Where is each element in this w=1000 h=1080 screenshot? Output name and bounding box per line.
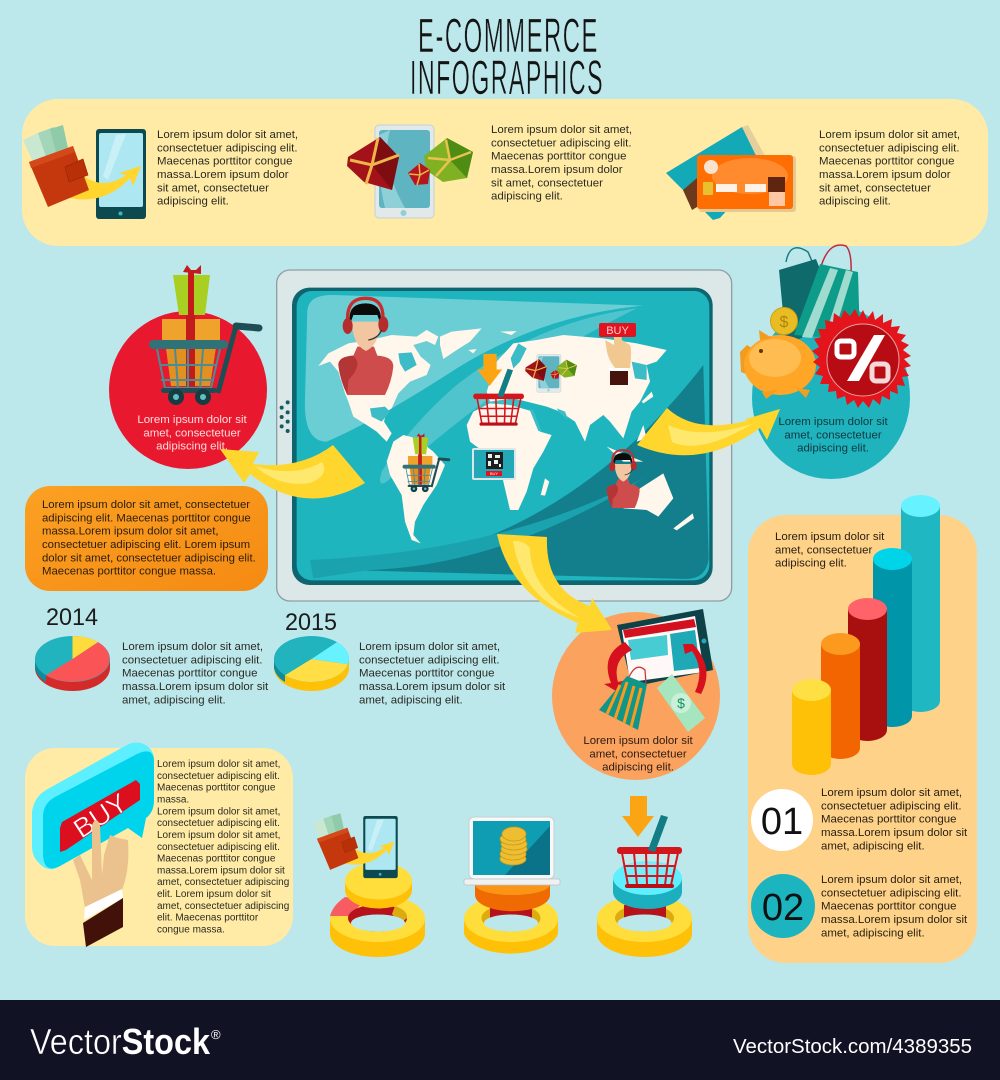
text: teal circle caption: amet, consectetuer — [784, 429, 882, 441]
badge: 01: 01 — [761, 801, 803, 843]
text: buy description: consectetuer adipiscing elit. — [157, 818, 280, 829]
text: buy description: elit. Maecenas porttitor — [157, 913, 259, 924]
pedestal: basket on ring — [597, 796, 692, 957]
text: buy description: congue massa. — [157, 924, 225, 935]
text: 2014 description: Maecenas porttitor congue — [122, 668, 257, 680]
text: item 01 description: Maecenas porttitor congue — [821, 814, 956, 826]
text: item 02 description: massa.Lorem ipsum dolor sit — [821, 914, 968, 926]
icon: wallet and phone — [23, 125, 146, 219]
icon: dollar banknote: $ — [677, 695, 685, 711]
pie chart: 2015 — [274, 636, 349, 691]
icon: shopping bags — [779, 245, 860, 345]
text: third top description: sit amet, consectetuer — [819, 182, 931, 194]
map seas — [370, 343, 647, 432]
text: first top description: sit amet, consectetuer — [157, 182, 269, 194]
pedestal: wallet on ring — [313, 813, 425, 957]
text: teal circle caption: Lorem ipsum dolor sit — [778, 416, 888, 428]
text: item 02 description: Lorem ipsum dolor sit amet, — [821, 874, 962, 886]
icon: percent badge — [812, 309, 911, 408]
text: 2015 description: Maecenas porttitor congue — [359, 668, 494, 680]
text: 2015 description: amet, adipiscing elit. — [359, 694, 463, 706]
text: teal circle caption: adipiscing elit. — [797, 443, 869, 455]
icon: map tablet gifts — [525, 354, 577, 392]
icon: map buy button with hand: BUY — [606, 325, 629, 337]
text: buy description: Lorem ipsum dolor sit amet, — [157, 830, 280, 841]
text: red circle caption: adipiscing elit. — [156, 441, 228, 453]
text: second top description: Maecenas porttitor congue — [491, 151, 626, 163]
text: red circle caption: Lorem ipsum dolor sit — [137, 414, 247, 426]
text: buy description: Lorem ipsum dolor sit amet, — [157, 759, 280, 770]
panel: orange text box — [25, 486, 268, 591]
icon: circular red arrows — [604, 642, 706, 694]
icon: buy speech bubble: BUY — [68, 787, 133, 844]
panel: orange text box: consectetuer adipiscing elit. Lorem ipsum — [42, 539, 250, 551]
icon: support agent small — [607, 450, 640, 508]
icon: tablet with gifts — [347, 125, 473, 218]
icon: credit cards — [666, 125, 796, 220]
text: buy description: amet, consectetuer adipiscing — [157, 901, 289, 912]
text: 2014 description: consectetuer adipiscing elit. — [122, 654, 263, 666]
icon: striped bag — [599, 667, 647, 730]
text: chart description: Lorem ipsum dolor sit — [775, 531, 885, 543]
text: first top description: massa.Lorem ipsum dolor — [157, 169, 289, 181]
panel: orange text box: massa.Lorem ipsum dolor sit amet, — [42, 526, 219, 538]
text: brand logo: VectorStock — [30, 1021, 211, 1062]
text: first top description: adipiscing elit. — [157, 196, 229, 208]
text: item 01 description: massa.Lorem ipsum dolor sit — [821, 827, 968, 839]
text: item 02 description: amet, adipiscing elit. — [821, 927, 925, 939]
text: 2015 description: Lorem ipsum dolor sit amet, — [359, 641, 500, 653]
panel: orange checkout circle — [552, 609, 720, 780]
pie chart: 2014 — [35, 636, 110, 691]
text: chart description: adipiscing elit. — [775, 558, 847, 570]
text: second top description: Lorem ipsum dolor sit amet, — [491, 124, 632, 136]
icon: shopping cart with gifts — [149, 265, 259, 405]
text: 2015 description: massa.Lorem ipsum dolor sit — [359, 681, 506, 693]
icon: map QR code tablet: BUY — [490, 471, 498, 476]
text: first top description: consectetuer adipiscing elit. — [157, 142, 298, 154]
icon: support agent large — [338, 298, 393, 395]
pedestal: laptop on ring — [464, 817, 560, 954]
text: buy description: consectetuer adipiscing elit. — [157, 771, 280, 782]
text: buy description: amet, consectetuer adipiscing — [157, 877, 289, 888]
badge: 02 — [751, 874, 815, 938]
icon: pointing hand — [73, 820, 128, 947]
icon: dollar banknote — [657, 674, 705, 732]
text: buy description: consectetuer adipiscing elit. — [157, 842, 280, 853]
panel: orange text box: Maecenas porttitor congue massa. — [42, 566, 216, 578]
icon: wallet to phone — [313, 813, 398, 878]
panel: red cart circle — [109, 265, 267, 469]
text: checkout caption: Lorem ipsum dolor sit — [583, 735, 693, 747]
text: third top description: Maecenas porttitor congue — [819, 156, 954, 168]
panel: top payment methods — [22, 99, 988, 246]
text: buy description: elit. Lorem ipsum dolor sit — [157, 889, 271, 900]
heading: 2014: 2014 — [46, 604, 98, 631]
text: registered mark: ® — [211, 1027, 221, 1042]
icon: map cart — [403, 433, 449, 492]
text: buy description: Lorem ipsum dolor sit amet, — [157, 806, 280, 817]
title: E-COMMERCE — [418, 10, 599, 63]
title — [410, 10, 604, 105]
text: item 02 description: Maecenas porttitor congue — [821, 901, 956, 913]
panel: orange text box: Lorem ipsum dolor sit amet, consectetuer — [42, 499, 250, 511]
icon: buy speech bubble — [32, 742, 154, 869]
text: image URL: VectorStock.com/4389355 — [733, 1036, 972, 1058]
text: 2014 description: Lorem ipsum dolor sit amet, — [122, 641, 263, 653]
panel: buy button text box — [25, 742, 293, 947]
text: buy description: massa.Lorem ipsum dolor sit — [157, 865, 285, 876]
text: second top description: adipiscing elit. — [491, 191, 563, 203]
icon: map basket — [473, 354, 524, 426]
text: third top description: adipiscing elit. — [819, 196, 891, 208]
badge: 02: 02 — [762, 887, 804, 929]
arrow: map to red circle — [220, 445, 365, 499]
chart: 3D cylinders — [792, 495, 940, 775]
text: 2015 description: consectetuer adipiscing elit. — [359, 654, 500, 666]
text: third top description: consectetuer adipiscing elit. — [819, 142, 960, 154]
text: item 02 description: consectetuer adipiscing elit. — [821, 887, 962, 899]
icon: map buy button with hand — [599, 323, 636, 385]
arrow: map to teal circle — [637, 408, 780, 455]
text: checkout caption: amet, consectetuer — [589, 748, 687, 760]
arrow: map to orange circle — [497, 534, 612, 633]
text: item 01 description: Lorem ipsum dolor sit amet, — [821, 787, 962, 799]
icon: map QR code tablet — [472, 448, 516, 480]
panel: bar chart panel — [748, 495, 977, 963]
icon: piggy bank with coin: $ — [780, 314, 789, 331]
text: INFOGRAPHICS — [410, 52, 604, 105]
icon: tablet storefront — [617, 609, 713, 687]
panel: tablet with world map — [277, 270, 732, 601]
panel: orange text box: adipiscing elit. Maecenas porttitor congue — [42, 512, 251, 524]
text: third top description: massa.Lorem ipsum dolor — [819, 169, 951, 181]
text: buy description: massa. — [157, 794, 189, 806]
panel: teal promotion circle — [740, 245, 911, 479]
text: third top description: Lorem ipsum dolor sit amet, — [819, 129, 960, 141]
world map — [318, 328, 694, 543]
speaker dots — [280, 400, 290, 433]
icon: basket with arrow — [617, 796, 682, 888]
text: buy description: Maecenas porttitor congue — [157, 854, 276, 865]
text: second top description: consectetuer adipiscing elit. — [491, 137, 632, 149]
icon: piggy bank with coin — [740, 308, 816, 399]
text: item 01 description: amet, adipiscing elit. — [821, 840, 925, 852]
text: first top description: Maecenas porttitor congue — [157, 156, 292, 168]
text: buy description: Maecenas porttitor congue — [157, 783, 276, 794]
text: second top description: sit amet, consectetuer — [491, 177, 603, 189]
text: 2014 description: amet, adipiscing elit. — [122, 694, 226, 706]
text: chart description: amet, consectetuer — [775, 544, 872, 556]
heading: 2015: 2015 — [285, 609, 337, 636]
panel: orange text box: dolor sit amet, consectetuer adipiscing elit. — [42, 552, 256, 564]
icon: laptop with coins — [464, 817, 560, 885]
text: second top description: massa.Lorem ipsum dolor — [491, 164, 623, 176]
text: 2014 description: massa.Lorem ipsum dolor sit — [122, 681, 269, 693]
badge: 01 — [751, 789, 813, 851]
text: checkout caption: adipiscing elit. — [602, 762, 674, 774]
footer: watermark bar — [0, 1000, 1000, 1080]
text: red circle caption: amet, consectetuer — [143, 427, 241, 439]
text: first top description: Lorem ipsum dolor sit amet, — [157, 129, 298, 141]
text: item 01 description: consectetuer adipiscing elit. — [821, 800, 962, 812]
